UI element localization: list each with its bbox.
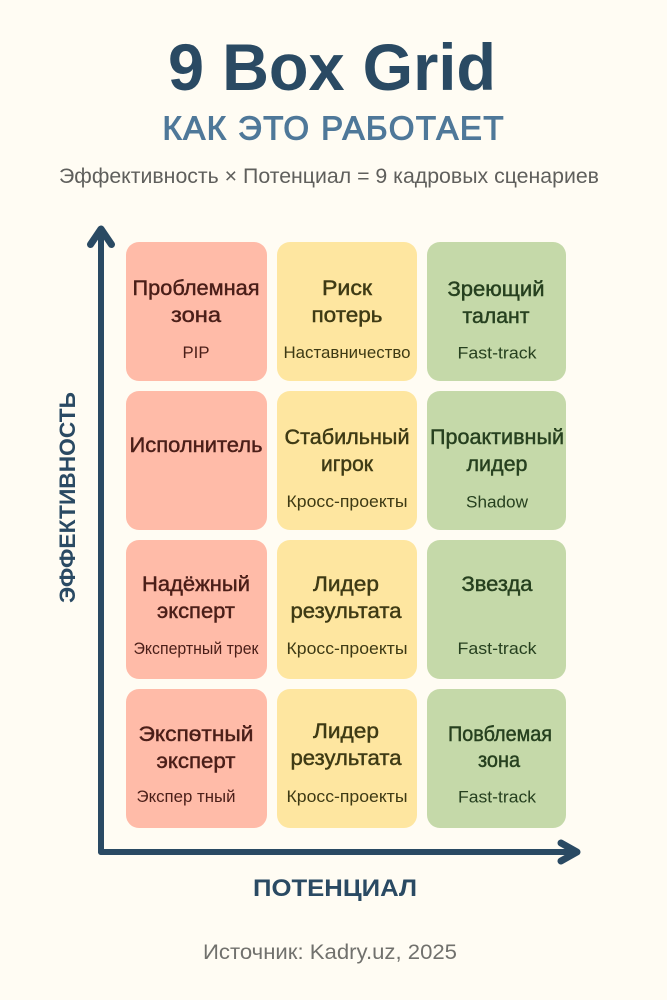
cell: Проактивный лидер: Проактивный: [430, 425, 564, 449]
cell: Стабильный игрок: Стабильный: [284, 425, 410, 449]
cell: Стабильный игрок: игрок: [321, 452, 374, 476]
cell: Стабильный игрок: [277, 391, 417, 530]
cell: Надёжный эксперт: эксперт: [157, 599, 235, 623]
cell: Лидер результата (bottom row): результата: [290, 746, 402, 770]
cell: Проблемная зона: PIP: [182, 344, 210, 362]
cell: Стабильный игрок: Кросс-проекты: [286, 493, 408, 511]
x axis label: ПОТЕНЦИАЛ: [253, 875, 417, 902]
cell: Повблемая зона: зона: [478, 748, 520, 772]
cell: Лидер результата (middle row): Кросс-проекты: [286, 640, 408, 658]
source note: Источник: Kadry.uz, 2025: [203, 941, 457, 964]
cell: Проблемная зона: [126, 242, 267, 381]
cell: Проактивный лидер: Shadow: [466, 494, 528, 512]
cell: Зреющий талант: талант: [462, 304, 530, 328]
cell: Звезда: [427, 540, 566, 679]
cell: Проблемная зона: Проблемная: [132, 276, 260, 300]
cell: Звезда: Fast-track: [458, 640, 537, 658]
cell: Лидер результата (bottom row): [277, 689, 417, 828]
cell: Надёжный эксперт: [126, 540, 267, 679]
cell: Повблемая зона: Fast-track: [458, 788, 537, 806]
y axis label: ЭФФЕКТИВНОСТЬ: [55, 392, 80, 603]
y axis arrow head: [90, 229, 112, 244]
cell: Повблемая зона: Повблемая: [448, 722, 552, 746]
cell: Риск потерь: Наставничество: [284, 344, 410, 362]
cell: Экспетный эксперт: Экспер тный: [136, 788, 236, 806]
cell: Проактивный лидер: лидер: [466, 452, 528, 476]
cell: Риск потерь: Риск: [322, 276, 373, 300]
cell: Риск потерь: [277, 242, 417, 381]
cell: Надёжный эксперт: Надёжный: [142, 572, 250, 596]
cell: Зреющий талант: [427, 242, 566, 381]
x axis arrow head: [561, 843, 577, 861]
cell: Звезда: Звезда: [462, 572, 533, 596]
cell: Повблемая зона: [427, 689, 566, 828]
cell: Зреющий талант: Fast-track: [458, 344, 537, 362]
title: 9 Box Grid: [168, 30, 496, 104]
x axis arrow: [101, 849, 577, 855]
cell: Экспетный эксперт: [126, 689, 267, 828]
cell: Лидер результата (bottom row): Лидер: [313, 719, 379, 743]
cell: Проблемная зона: зона: [171, 303, 221, 327]
cell: Лидер результата (middle row): [277, 540, 417, 679]
cell: Проактивный лидер: [427, 391, 566, 530]
cell: Зреющий талант: Зреющий: [448, 277, 544, 301]
y axis arrow: [98, 229, 104, 852]
cell: Риск потерь: потерь: [312, 303, 382, 327]
subtitle: КАК ЭТО РАБОТАЕТ: [162, 110, 504, 146]
cell: Лидер результата (middle row): Лидер: [313, 572, 379, 596]
cell: Лидер результата (bottom row): Кросс-проекты: [286, 788, 408, 806]
cell: Экспетный эксперт: Экспѳтный: [138, 722, 254, 746]
cell: Экспетный эксперт: эксперт: [156, 749, 236, 773]
cell: Исполнитель: Исполнитель: [130, 433, 262, 457]
cell: Надёжный эксперт: Экспертный трек: [134, 640, 259, 658]
cell: Исполнитель: [126, 391, 267, 530]
cell: Лидер результата (middle row): результата: [290, 599, 402, 623]
formula line: Эффективность × Потенциал = 9 кадровых сценариев: [59, 165, 599, 188]
